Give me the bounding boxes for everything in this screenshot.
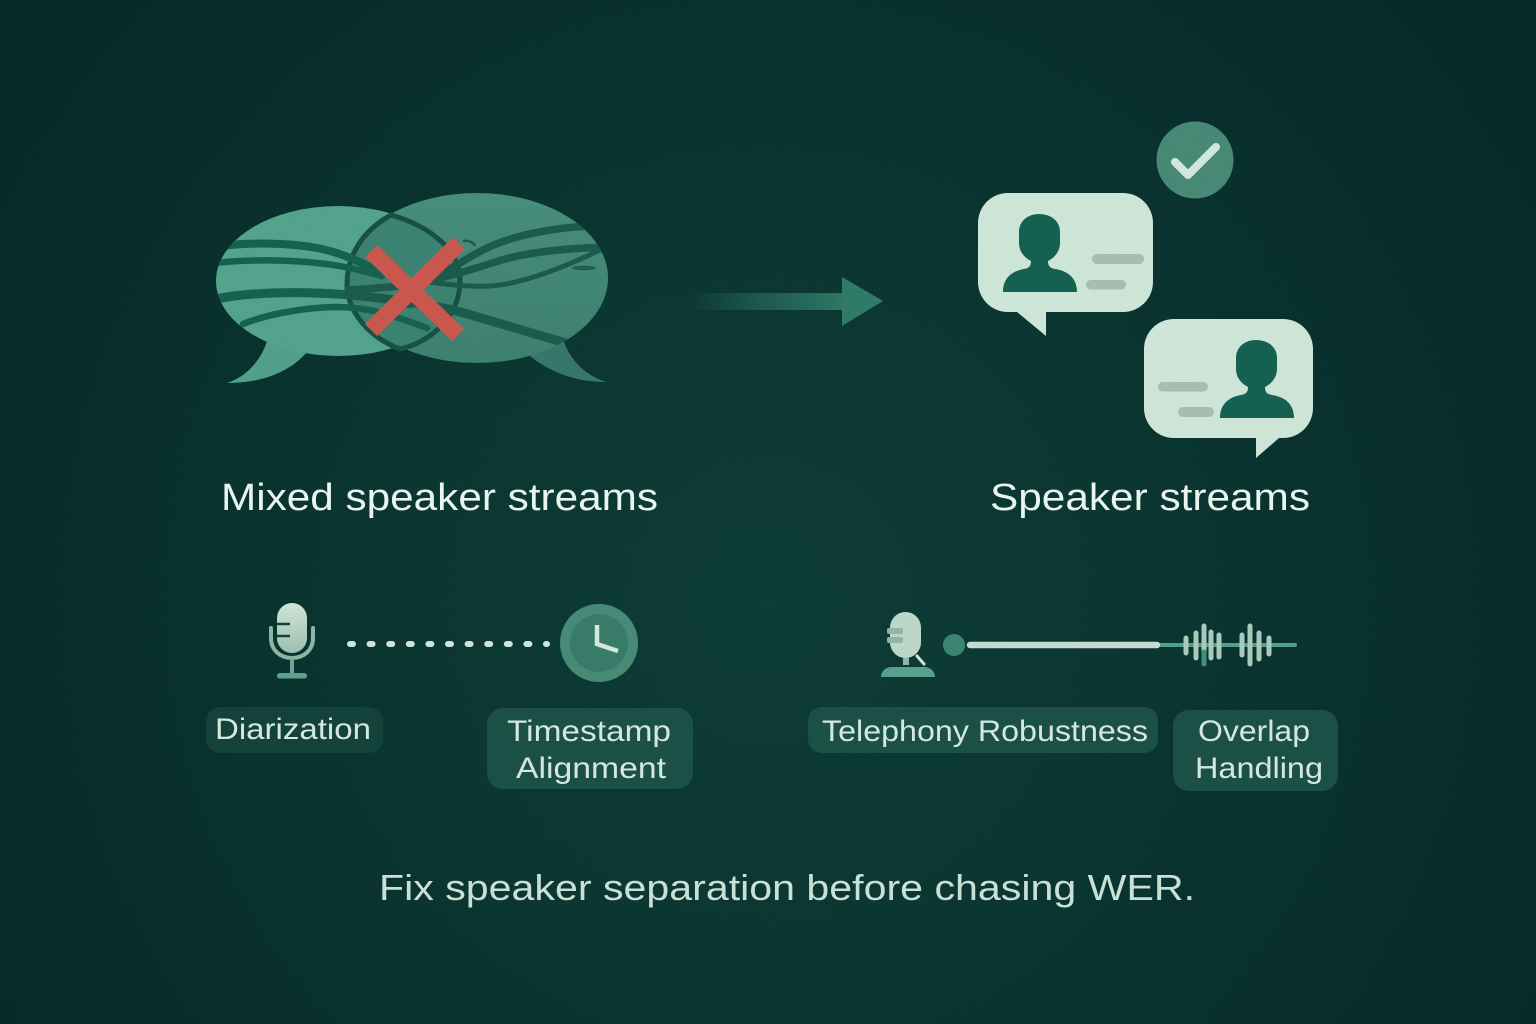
right speech bubble [346, 193, 608, 382]
label: Overlap Handling: Handling [1195, 752, 1323, 785]
label: Diarization: Diarization [215, 713, 371, 746]
label: Overlap Handling [1173, 710, 1338, 791]
heading: speaker streams: Speaker streams [990, 477, 1310, 519]
icon: check badge [1156, 122, 1234, 198]
icon: microphone [271, 603, 313, 678]
signal line and waveform [943, 626, 1295, 664]
small shadow mark in right bubble [572, 266, 596, 270]
label: Diarization [206, 707, 383, 753]
label: Overlap Handling: Overlap [1198, 715, 1310, 748]
label: Timestamp Alignment: Alignment [516, 752, 667, 785]
icon: person silhouette [1220, 340, 1294, 418]
takeaway caption: Fix speaker separation before chasing WER. [379, 867, 1195, 908]
speaker bubble one [978, 193, 1153, 336]
overlap lens [347, 215, 460, 349]
label: Timestamp Alignment [487, 708, 693, 789]
icon: tangled overlapping speech bubbles [214, 193, 608, 383]
label: Timestamp Alignment: Timestamp [507, 715, 671, 748]
red cross mark [371, 243, 459, 335]
speaker bubble two [1144, 319, 1313, 458]
icon: studio microphone [881, 612, 935, 677]
waveform bars [1186, 626, 1269, 664]
arrow [690, 277, 883, 326]
icon: clock [560, 604, 638, 682]
label: Telephony Robustness: Telephony Robustness [822, 715, 1148, 748]
label: Telephony Robustness [808, 707, 1158, 753]
infographic canvas [198, 30, 1338, 1024]
left speech bubble [216, 206, 460, 383]
text placeholder bars [1086, 254, 1144, 290]
text placeholder bars [1158, 382, 1214, 417]
tangled strands in left bubble [214, 244, 427, 328]
dotted connector [350, 641, 547, 647]
heading: mixed speaker streams: Mixed speaker streams [221, 477, 658, 519]
tangled strands in right bubble [348, 226, 606, 343]
icon: person silhouette [1003, 214, 1077, 292]
